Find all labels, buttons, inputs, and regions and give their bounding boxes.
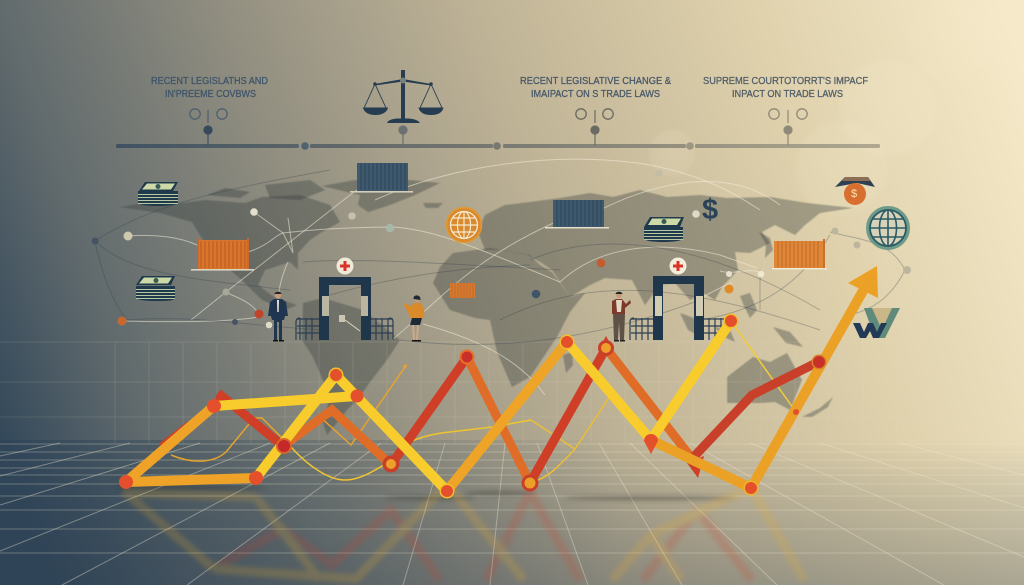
timeline marker 2 bbox=[398, 125, 408, 146]
thin arrow line: amber rise bbox=[318, 364, 407, 445]
orange series left bbox=[283, 410, 391, 465]
icon: dark container top bbox=[350, 163, 413, 193]
timeline marker 3 bbox=[576, 109, 613, 146]
data points bbox=[119, 314, 826, 498]
icon: logo letters W V bbox=[853, 308, 900, 338]
thin curve: yellow trend centre bbox=[291, 420, 531, 480]
thin curve: yellow right bbox=[531, 393, 612, 480]
icon: orange globe bbox=[446, 208, 482, 242]
timeline marker 1 bbox=[190, 109, 227, 146]
amber series base bbox=[126, 406, 256, 482]
person: woman in orange jacket bbox=[403, 295, 424, 342]
heading: supreme court impact: INPACT ON TRADE LAWS bbox=[732, 88, 843, 100]
icon: teal globe bbox=[866, 206, 910, 250]
red series middle bbox=[391, 357, 467, 465]
thin line: yellow to Australia bbox=[731, 321, 796, 412]
amber growth arrow bbox=[651, 266, 878, 488]
trade route network bbox=[95, 159, 905, 395]
route nodes bbox=[92, 170, 911, 328]
heading: recent legislation: IN'PREEME COVBWS bbox=[165, 88, 256, 100]
person: man in brown jacket bbox=[612, 292, 631, 342]
yellow series bbox=[214, 375, 447, 491]
timeline marker 4 bbox=[769, 109, 807, 146]
orange series right bbox=[606, 348, 697, 465]
heading: supreme court impact bbox=[703, 75, 868, 100]
line chart bbox=[119, 266, 878, 498]
icon: dark container right bbox=[545, 200, 609, 228]
heading: recent legislation bbox=[151, 75, 268, 100]
icon: orange container left bbox=[191, 238, 254, 271]
icon: coin with roof bbox=[835, 177, 875, 205]
yellow series centre bbox=[567, 321, 731, 440]
thin curve: amber trend left bbox=[171, 418, 291, 461]
icon: money stack centre right bbox=[644, 217, 684, 242]
chart reflection on floor bbox=[126, 484, 804, 580]
heading: legislative change: IMAIPACT ON S TRADE LAWS bbox=[531, 88, 660, 100]
heading: legislative change bbox=[520, 75, 671, 100]
timeline bar bbox=[116, 142, 880, 150]
right gate checkpoint bbox=[630, 258, 725, 340]
red series bbox=[162, 393, 283, 447]
heading: supreme court impact: SUPREME COURTOTORRT'S IMPACF bbox=[703, 75, 868, 87]
world map bbox=[120, 180, 853, 435]
icon: scales of justice bbox=[363, 70, 444, 123]
heading: legislative change: RECENT LEGISLATIVE CHANGE & bbox=[520, 75, 671, 87]
person: man in navy suit bbox=[268, 292, 288, 342]
red series right bbox=[530, 348, 606, 483]
icon: small orange container bbox=[450, 283, 475, 298]
ground shadow under chart bbox=[115, 486, 735, 500]
floor and wall grid bbox=[0, 342, 1024, 585]
left gate checkpoint bbox=[296, 258, 393, 340]
heading: recent legislation: RECENT LEGISLATHS AND bbox=[151, 75, 268, 87]
icon: dollar sign: $ bbox=[702, 194, 718, 226]
icon: money stack left bbox=[136, 276, 175, 301]
icon: coin with roof: $ bbox=[851, 188, 857, 200]
icon: money stack top left bbox=[138, 182, 178, 206]
orange series middle bbox=[467, 357, 530, 483]
red series end bbox=[688, 362, 818, 463]
amber series bbox=[447, 342, 567, 491]
icon: orange container right bbox=[772, 239, 827, 270]
